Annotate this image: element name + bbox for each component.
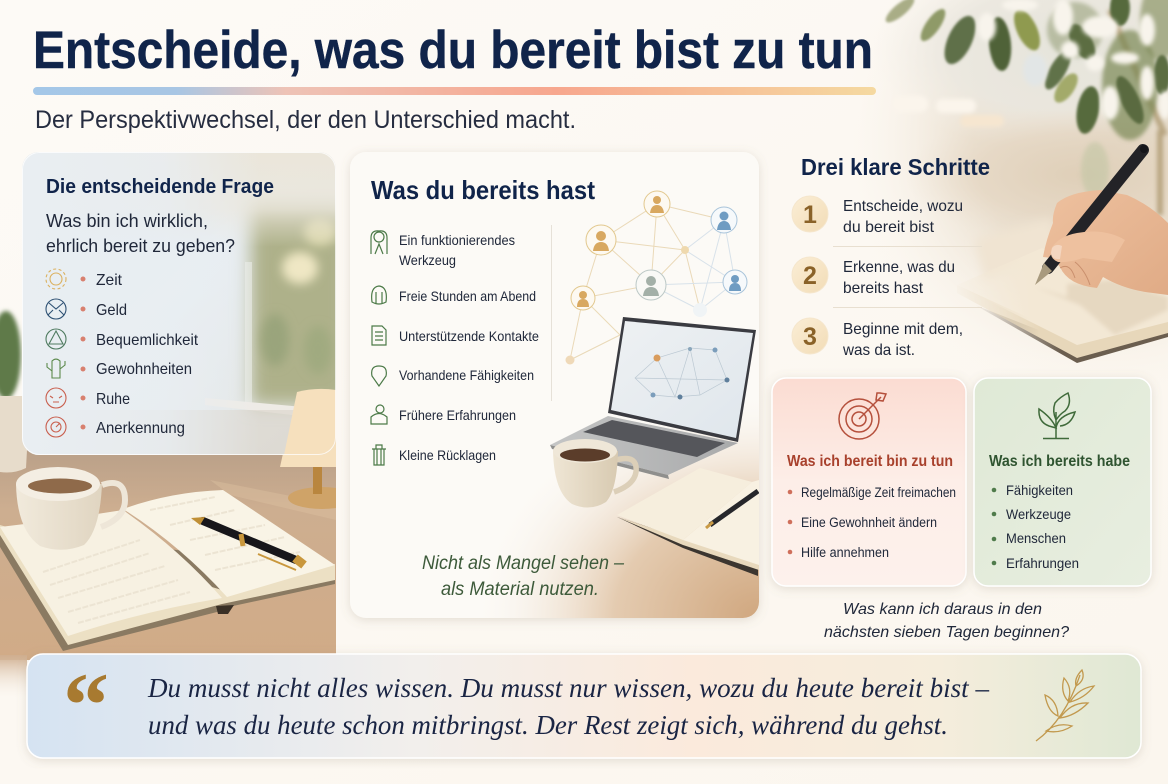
- table surface: [0, 445, 336, 660]
- step 1: Entscheide, wozu: [843, 198, 963, 215]
- caption: [422, 552, 624, 600]
- resource list: Kleine Rücklagen: [399, 447, 496, 463]
- card list: Eine Gewohnheit ändern: [801, 515, 937, 530]
- card list: [992, 483, 1079, 571]
- card list: Hilfe annehmen: [801, 545, 889, 560]
- laptop: [550, 317, 756, 479]
- icon: clock face: [46, 388, 66, 408]
- notebook: [0, 490, 335, 651]
- card list: Fähigkeiten: [1006, 483, 1073, 498]
- resource list: Freie Stunden am Abend: [399, 288, 536, 304]
- subtitle: Der Perspektivwechsel, der den Unterschied macht.: [35, 106, 576, 134]
- quote text: und was du heute schon mitbringst. Der Rest zeigt sich, während du gehst.: [148, 710, 948, 740]
- panel heading: Die entscheidende Frage: [46, 175, 274, 198]
- icon: leaf sprig: [1036, 670, 1094, 741]
- list: what to give: Geld: [96, 302, 127, 319]
- resource list: Werkzeug: [399, 252, 456, 268]
- caption: als Material nutzen.: [441, 578, 599, 600]
- step 3: was da ist.: [842, 342, 915, 359]
- card heading: Was ich bereits habe: [989, 453, 1130, 470]
- step 1: du bereit bist: [843, 219, 935, 236]
- icon: lightbulb: [372, 366, 386, 386]
- thumb: [1051, 232, 1125, 262]
- resource list: [371, 231, 539, 465]
- photo: hand writing in a notebook: [957, 145, 1168, 363]
- icon: hours: [372, 286, 386, 304]
- list: what to give: Bequemlichkeit: [96, 332, 199, 349]
- quote text: Du musst nicht alles wissen. Du musst nur wissen, wozu du heute bereit bist –: [147, 673, 989, 703]
- icon: person at work: [371, 405, 387, 424]
- quote banner: [27, 654, 1141, 758]
- pen on notebook: [191, 517, 304, 570]
- open notebook: [957, 248, 1168, 363]
- background plant, top right: [870, 0, 1168, 245]
- resource list: Unterstützende Kontakte: [399, 328, 539, 344]
- card list: [788, 485, 956, 560]
- step 3: 3: [803, 323, 817, 351]
- table lamp: [280, 440, 336, 509]
- closing question: [824, 601, 1069, 641]
- hand: [1043, 190, 1168, 295]
- blurred page behind: [975, 218, 1060, 280]
- step 2: [792, 257, 955, 297]
- network diagram: [566, 191, 747, 364]
- card list: Regelmäßige Zeit freimachen: [801, 485, 956, 500]
- icon: sun: [46, 269, 66, 289]
- title: Entscheide, was du bereit bist zu tun: [33, 21, 873, 80]
- left edge wood fading below the desk: [0, 655, 27, 700]
- step 1: [792, 196, 963, 236]
- icon: quotation mark: “: [63, 654, 109, 756]
- card: was ich bereit bin zu tun: [772, 378, 966, 586]
- title underline: [33, 87, 876, 95]
- question: [46, 211, 235, 256]
- question: ehrlich bereit zu geben?: [46, 236, 235, 256]
- icon: tool: [371, 231, 387, 254]
- section: drei klare Schritte: [792, 154, 990, 359]
- icon: jar: [372, 445, 386, 465]
- question: Was bin ich wirklich,: [46, 211, 208, 231]
- icon: cactus: [47, 359, 65, 378]
- card list: Menschen: [1006, 531, 1066, 546]
- panel heading: Was du bereits hast: [371, 175, 595, 205]
- panel: was du bereits hast: [350, 152, 759, 618]
- resource list: Frühere Erfahrungen: [399, 407, 516, 423]
- small notebook: [617, 468, 759, 576]
- card: was ich bereits habe: [974, 378, 1151, 586]
- card heading: Was ich bereit bin zu tun: [787, 453, 953, 470]
- icon: coin: [46, 299, 66, 319]
- card list: Erfahrungen: [1006, 556, 1079, 571]
- card list: Werkzeuge: [1006, 507, 1071, 522]
- step 2: bereits hast: [843, 280, 924, 297]
- coffee cup: [553, 439, 636, 508]
- quote text: [147, 673, 989, 740]
- list: what to give: Anerkennung: [96, 420, 185, 437]
- potted plant: [0, 311, 30, 472]
- step 1: 1: [803, 201, 817, 229]
- person node gold small: [571, 286, 595, 310]
- person node blue small: [723, 270, 747, 294]
- closing question: nächsten sieben Tagen beginnen?: [824, 624, 1069, 641]
- closing question: Was kann ich daraus in den: [843, 601, 1042, 618]
- step 2: 2: [803, 262, 817, 290]
- person node blue: [711, 207, 737, 233]
- icon: sprout: [1039, 393, 1075, 438]
- person node grey: [636, 270, 666, 300]
- caption: Nicht als Mangel sehen –: [422, 552, 624, 574]
- person node gold large: [586, 225, 616, 255]
- icon: target: [46, 417, 66, 437]
- step 2: Erkenne, was du: [843, 259, 955, 276]
- list: what to give: [80, 272, 199, 437]
- list: what to give: Zeit: [96, 272, 123, 289]
- list: what to give: Gewohnheiten: [96, 361, 192, 378]
- panel: die entscheidende Frage: [22, 152, 350, 455]
- icon: contacts sheet: [372, 326, 386, 345]
- section heading: Drei klare Schritte: [801, 154, 990, 180]
- icon: mountain: [46, 329, 66, 349]
- person node gold: [644, 191, 670, 217]
- coffee cup: [16, 467, 125, 550]
- step 3: [792, 318, 963, 359]
- photo: desk with window, notebook and cup: [0, 311, 356, 660]
- icon: target with arrow: [839, 393, 886, 439]
- list: what to give: Ruhe: [96, 391, 130, 408]
- resource list: Vorhandene Fähigkeiten: [399, 367, 534, 383]
- pen in hand: [1035, 145, 1148, 285]
- step 3: Beginne mit dem,: [843, 321, 963, 338]
- resource list: Ein funktionierendes: [399, 232, 515, 248]
